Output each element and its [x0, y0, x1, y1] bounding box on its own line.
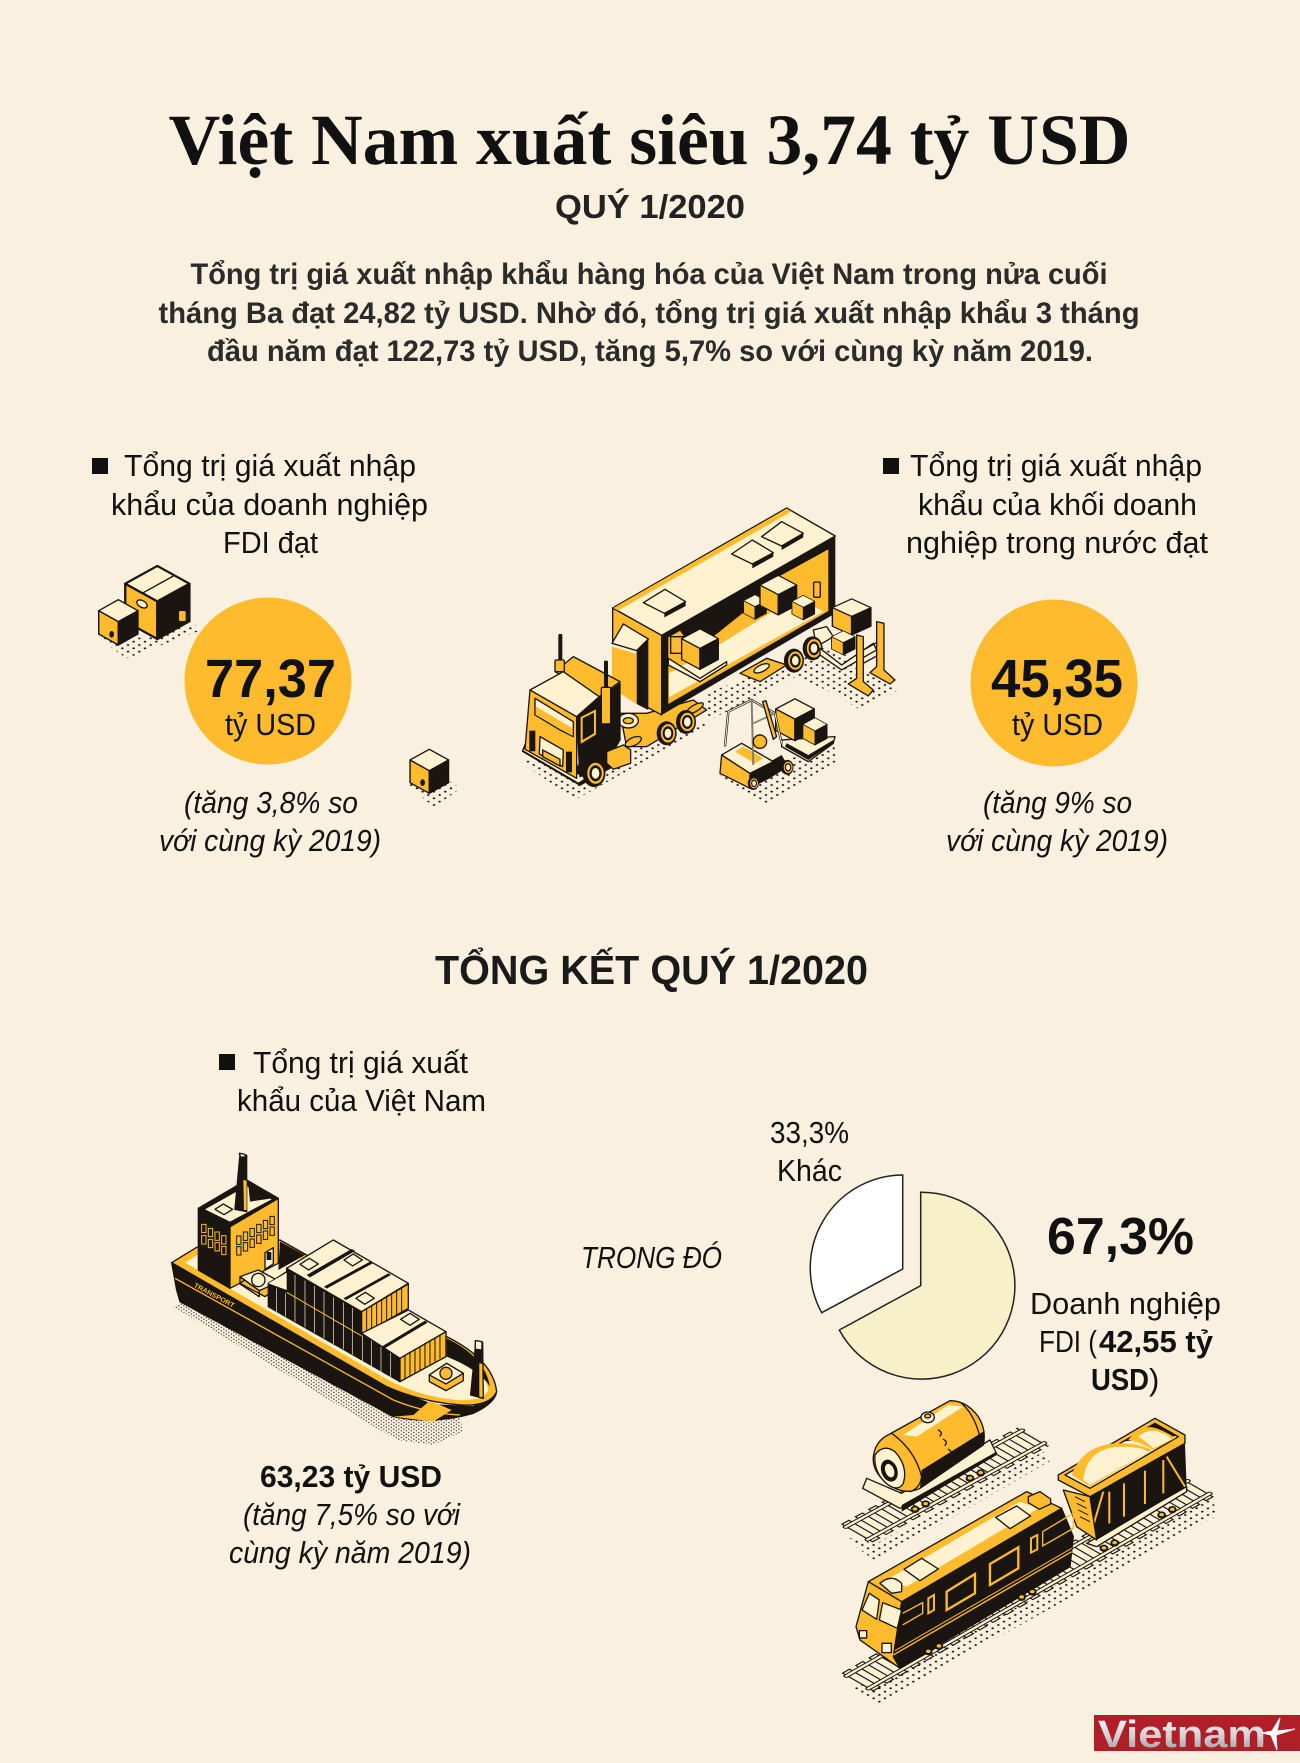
- illustration: container ship: [172, 1153, 497, 1445]
- containers: tops and ends: [287, 1240, 408, 1312]
- track 2: [846, 1481, 1210, 1689]
- text: FDI heading: FDI đạt: [223, 525, 318, 560]
- label: FDI share: ): [1149, 1362, 1159, 1397]
- cab: [522, 743, 620, 786]
- funnel: [235, 1154, 247, 1212]
- hull name: TRANSPORT: [192, 1282, 235, 1310]
- value: 63,23: 63,23 tỷ USD: [260, 1459, 442, 1494]
- forklift group: [782, 737, 835, 762]
- panel: export value: [229, 1459, 471, 1570]
- circle: FDI value: [184, 598, 352, 764]
- locomotive windows: [947, 1574, 975, 1610]
- logo: Vietnam+: Vietnam: [1098, 1714, 1266, 1756]
- text: FDI heading: Tổng trị giá xuất nhập: [124, 448, 416, 483]
- title: Việt Nam xuất siêu 3,74 tỷ USD: [168, 100, 1130, 180]
- locomotive roof details: [904, 1558, 938, 1581]
- panel: export text: [219, 1045, 486, 1118]
- note: export growth: cùng kỳ năm 2019): [229, 1535, 471, 1570]
- pallet stack and hand truck: [820, 643, 877, 670]
- text: FDI heading: [111, 448, 428, 560]
- bullet: domestic: [883, 458, 899, 474]
- icon: small box: [405, 749, 461, 807]
- value: 77,37: 77,37: [205, 649, 336, 709]
- label: FDI share: 42,55 tỷ: [1099, 1324, 1214, 1359]
- label: FDI share: [1030, 1208, 1221, 1397]
- slice: other 33,3%: [810, 1175, 903, 1313]
- text: domestic heading: nghiệp trong nước đạt: [906, 525, 1208, 560]
- locomotive: [892, 1508, 1073, 1668]
- note: domestic growth: (tăng 9% so: [983, 785, 1132, 820]
- value: 45,35: 45,35: [991, 649, 1123, 709]
- note: export growth: (tăng 7,5% so với: [243, 1497, 461, 1532]
- label: FDI share: 67,3%: [1047, 1208, 1194, 1266]
- trailer roof: [613, 508, 835, 635]
- rear chassis and wheels: [740, 658, 787, 682]
- pie chart: [810, 1175, 1015, 1379]
- trailer side frame: [662, 536, 835, 715]
- note: FDI growth: với cùng kỳ 2019): [159, 823, 381, 858]
- illustration: trains: [842, 1401, 1218, 1705]
- label: FDI share: FDI (: [1039, 1324, 1098, 1359]
- label: other share: 33,3%: [770, 1115, 849, 1150]
- illustration: truck with forklift: [518, 508, 898, 805]
- shadow dots: [518, 647, 898, 800]
- label: FDI share: USD: [1091, 1362, 1149, 1397]
- bullet: export: [219, 1054, 235, 1070]
- cargo inside trailer: [668, 658, 727, 682]
- circle: domestic value: [970, 600, 1138, 766]
- slice: FDI 67,3%: [839, 1192, 1015, 1379]
- text: export heading: khẩu của Việt Nam: [237, 1083, 486, 1118]
- text: domestic heading: khẩu của khối doanh: [918, 487, 1197, 522]
- exhaust stacks: [558, 634, 562, 662]
- text: domestic heading: [906, 448, 1208, 560]
- panel: FDI enterprises: [92, 448, 428, 858]
- ship shadow: [173, 1302, 463, 1445]
- note: export growth: [229, 1497, 471, 1570]
- note: FDI growth: [159, 785, 381, 858]
- intro paragraph: tháng Ba đạt 24,82 tỷ USD. Nhờ đó, tổng trị giá xuất nhập khẩu 3 tháng: [158, 297, 1140, 330]
- containers: lower/side wall: [268, 1272, 400, 1382]
- track 1: [846, 1430, 1044, 1540]
- text: domestic heading: Tổng trị giá xuất nhập: [910, 448, 1202, 483]
- note: domestic growth: [946, 785, 1168, 858]
- label: trong do: TRONG ĐÓ: [581, 1240, 722, 1275]
- bow mast: [471, 1341, 483, 1398]
- deck hatch: [240, 1270, 283, 1297]
- note: FDI growth: (tăng 3,8% so: [184, 785, 358, 820]
- train shadows: [842, 1452, 1052, 1562]
- note: domestic growth: với cùng kỳ 2019): [946, 823, 1168, 858]
- intro paragraph: Tổng trị giá xuất nhập khẩu hàng hóa của Việt Nam trong nửa cuối: [190, 258, 1108, 291]
- subtitle: QUÝ 1/2020: [555, 188, 745, 225]
- section heading: TỔNG KẾT QUÝ 1/2020: [435, 946, 868, 993]
- tank wagon: [873, 1401, 984, 1491]
- deck: [172, 1240, 497, 1405]
- label: FDI share: Doanh nghiệp: [1030, 1286, 1221, 1321]
- superstructure: [198, 1208, 230, 1288]
- tank wagon base: [863, 1440, 997, 1508]
- bow hatch: [429, 1363, 463, 1391]
- icon: stacked boxes: [93, 566, 202, 658]
- text: FDI heading: khẩu của doanh nghiệp: [111, 487, 428, 522]
- intro paragraph: đầu năm đạt 122,73 tỷ USD, tăng 5,7% so với cùng kỳ năm 2019.: [207, 335, 1093, 368]
- container hatches: [300, 1258, 318, 1270]
- tower windows: [202, 1224, 226, 1255]
- hull: [172, 1263, 497, 1420]
- label: other share: [770, 1115, 849, 1188]
- panel: domestic enterprises: [883, 448, 1208, 858]
- label: other share: Khác: [777, 1153, 842, 1188]
- intro paragraph: [158, 258, 1140, 368]
- unit: FDI: tỷ USD: [225, 707, 316, 742]
- bullet: FDI: [92, 458, 108, 474]
- text: export heading: Tổng trị giá xuất: [253, 1045, 468, 1080]
- text: export heading: [237, 1045, 486, 1118]
- hopper wagon: [1087, 1487, 1187, 1547]
- trailer rear/left face: [613, 608, 662, 715]
- unit: domestic: tỷ USD: [1012, 707, 1103, 742]
